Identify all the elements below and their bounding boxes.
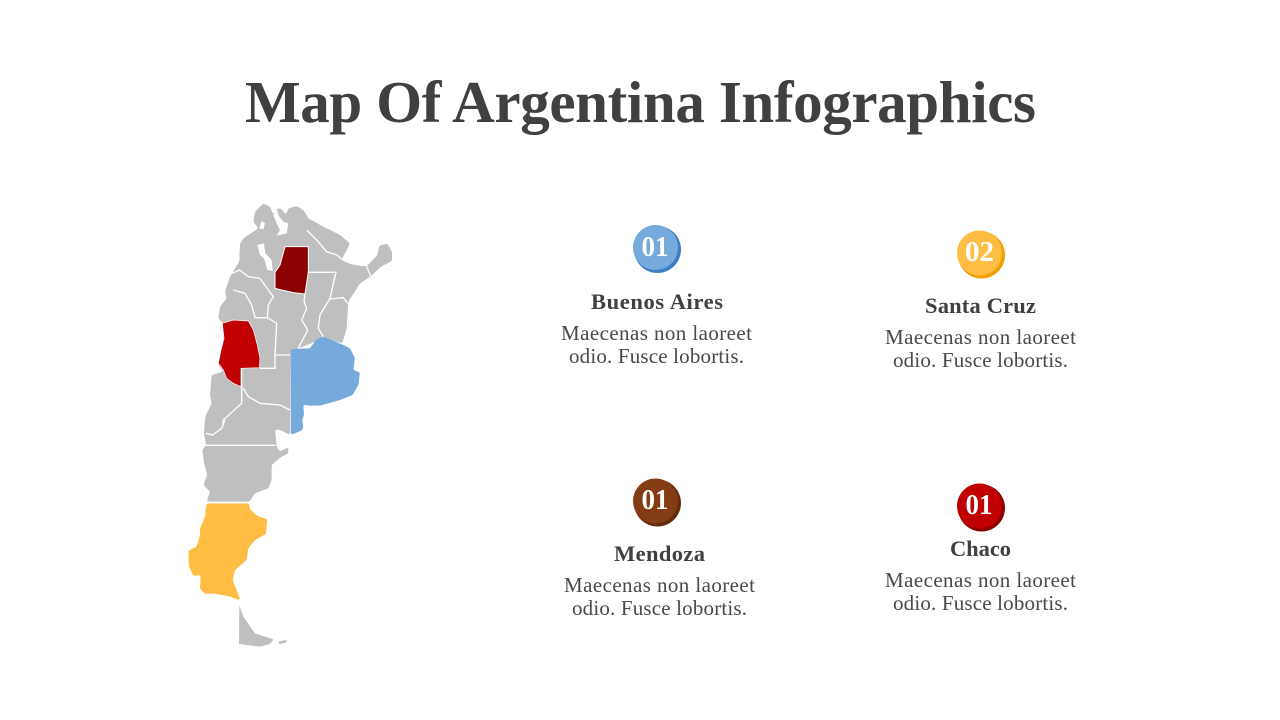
badge 02 yellow: 02 — [965, 237, 994, 268]
badge 01 blue: 01 — [642, 232, 668, 263]
body text — [564, 573, 755, 620]
badge 01 brown: 01 — [642, 485, 668, 516]
map: Santa Cruz province — [188, 503, 267, 601]
map: Mendoza province — [218, 320, 260, 387]
map: white gaps in the north — [257, 208, 288, 271]
map: Buenos Aires province — [291, 337, 360, 435]
body text: odio. Fusce lobortis. — [572, 596, 747, 620]
card: Chaco — [885, 484, 1076, 615]
body text — [885, 325, 1076, 372]
title: Map Of Argentina Infographics — [245, 69, 1036, 135]
body text: odio. Fusce lobortis. — [893, 348, 1068, 372]
map: grey provinces — [202, 203, 392, 502]
heading: Mendoza — [614, 541, 705, 566]
badge 01 brown — [633, 478, 681, 526]
badge 01 red — [957, 484, 1005, 532]
body text — [561, 321, 752, 368]
body text: odio. Fusce lobortis. — [893, 591, 1068, 615]
map: Chaco province — [275, 247, 308, 294]
card: Santa Cruz — [885, 230, 1076, 372]
badge 01 blue — [633, 225, 681, 273]
body text: Maecenas non laoreet — [564, 573, 755, 597]
heading: Chaco — [950, 536, 1011, 561]
badge 02 yellow — [957, 230, 1005, 278]
body text — [885, 568, 1076, 615]
heading: Buenos Aires — [591, 289, 723, 314]
body text: Maecenas non laoreet — [885, 325, 1076, 349]
map: Tierra del Fuego — [239, 606, 287, 647]
map: province borders — [205, 230, 371, 445]
card: Buenos Aires — [561, 225, 752, 368]
badge 01 red: 01 — [966, 490, 992, 521]
heading: Santa Cruz — [925, 293, 1036, 318]
card: Mendoza — [564, 478, 755, 620]
body text: Maecenas non laoreet — [885, 568, 1076, 592]
body text: Maecenas non laoreet — [561, 321, 752, 345]
map of Argentina — [188, 203, 392, 647]
body text: odio. Fusce lobortis. — [569, 344, 744, 368]
